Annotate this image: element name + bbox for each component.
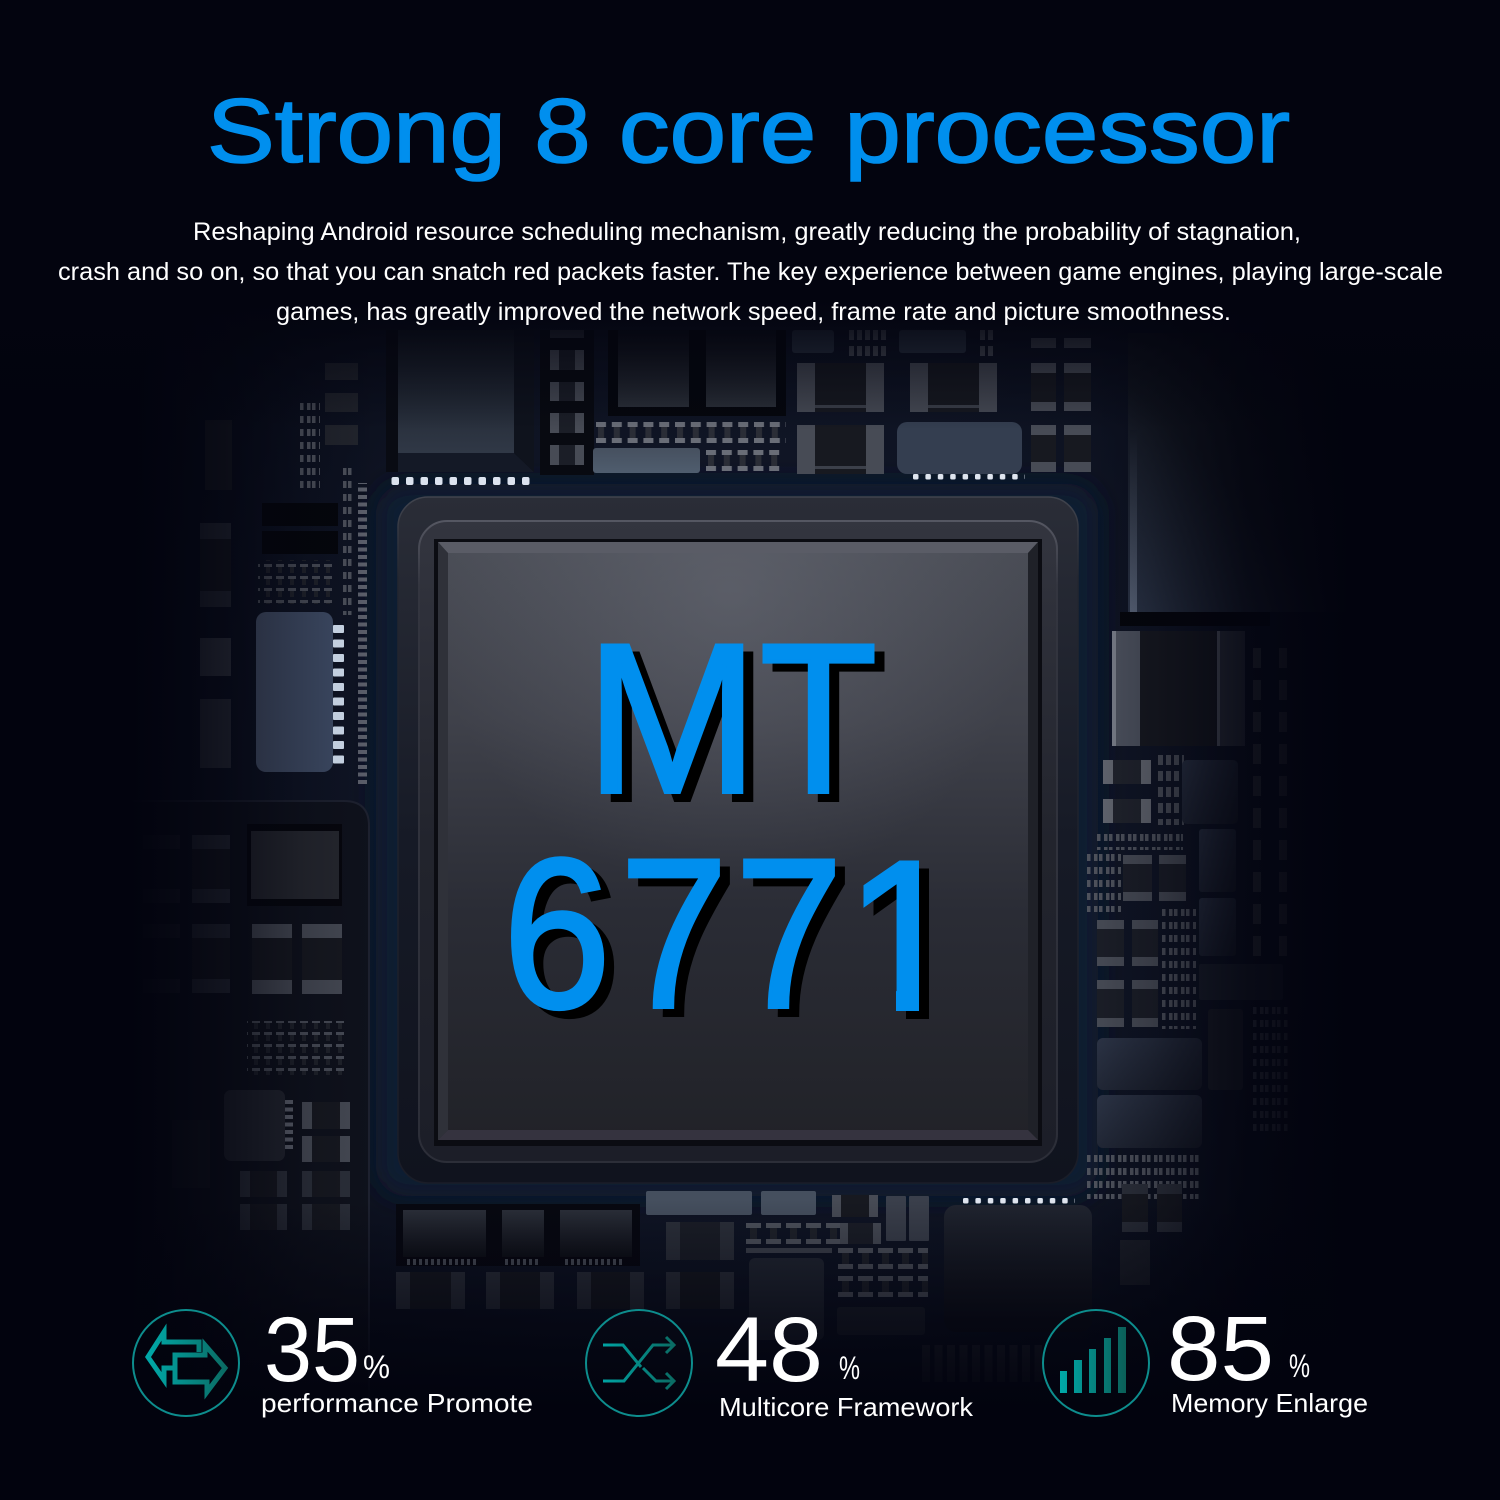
board: top left components	[200, 363, 367, 786]
intro paragraph: crash and so on, so that you can snatch red packets faster. The key experience between game engines, playing large-scale	[58, 258, 1443, 286]
stat: 48% multicore framework	[586, 1299, 974, 1422]
percent sign: %	[363, 1349, 390, 1385]
value 48: 48	[715, 1299, 823, 1401]
icon: shuffle arrows	[586, 1310, 692, 1416]
board: lower left panel	[120, 801, 369, 1490]
value 85: 85	[1167, 1298, 1274, 1400]
percent sign: %	[839, 1350, 860, 1386]
icon: exchange arrows	[133, 1310, 239, 1416]
label: Memory Enlarge	[1171, 1388, 1368, 1418]
chip label: MT 6771: 677	[503, 816, 843, 1053]
value 35: 35	[264, 1299, 360, 1401]
board: processor package	[398, 497, 1078, 1183]
percent sign: %	[1289, 1348, 1310, 1384]
icon: signal bars	[1043, 1310, 1149, 1416]
stat: 35% performance promote	[133, 1299, 533, 1418]
board: upper right components	[797, 338, 1091, 480]
intro paragraph	[58, 218, 1443, 326]
board: large top-left chip	[386, 330, 534, 485]
board: upper centre components	[540, 330, 993, 475]
stat: 85% memory enlarge	[1043, 1298, 1368, 1418]
label: Multicore Framework	[719, 1392, 974, 1422]
board: right lower components	[1087, 631, 1289, 1285]
board: right tall block	[1120, 333, 1360, 626]
chip label: MT 6771	[511, 644, 929, 1020]
intro paragraph: Reshaping Android resource scheduling mechanism, greatly reducing the probability of stagnation,	[193, 218, 1301, 246]
board: blue chip with pads	[256, 612, 345, 772]
board: bottom components	[396, 1191, 1092, 1382]
title: Strong 8 core processor	[207, 81, 1290, 182]
intro paragraph: games, has greatly improved the network speed, frame rate and picture smoothness.	[276, 298, 1231, 326]
chip label: MT 6771: M	[586, 599, 758, 838]
chip label: MT 6771: 1	[845, 817, 963, 1055]
chip label: MT 6771: T	[760, 600, 877, 837]
label: performance Promote	[261, 1388, 533, 1418]
